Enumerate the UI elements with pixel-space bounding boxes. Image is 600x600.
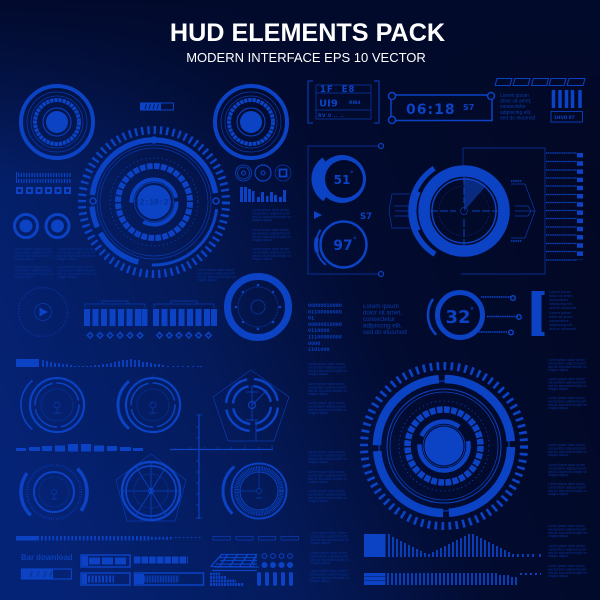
- lorem blocks: lower right left column: sed do eiusmod tempor un: [308, 457, 347, 461]
- lorem blocks: lower right right column: consectetur adipiscing elit: [548, 485, 586, 489]
- progress strip: [16, 536, 201, 540]
- lorem blocks: lower right left column: consectetur adipiscing elit: [308, 385, 346, 389]
- data list: [546, 153, 580, 260]
- radar dial: [392, 141, 532, 281]
- lorem block: panel: sed do eiusmod: [500, 115, 536, 121]
- lorem blocks: lower right right column: consectetur adipiscing elit: [548, 567, 586, 571]
- lorem blocks: lower right right column: magna aliqua: [548, 406, 568, 410]
- bar chart: small: [240, 187, 286, 202]
- vertical bars with label: 1HUD 87: [554, 115, 575, 120]
- lorem blocks: right of main dial: sed do eiusmod tempor un: [252, 235, 291, 239]
- lorem blocks: left: consectetur adipiscing elit: [57, 268, 95, 272]
- panel frame: temperature gauges: [308, 144, 384, 276]
- tick bars: left: [16, 172, 72, 183]
- binary text: 00000010000: [308, 322, 342, 328]
- lorem block: beside bracket: adipiscing elit,: [549, 302, 573, 306]
- lorem blocks: lower right right column: Lorem ipsum dolor sit am: [548, 544, 585, 548]
- lorem blocks: lower right left column: sed do eiusmod tempor un: [308, 496, 347, 500]
- block row: [134, 556, 188, 564]
- target dial: row 2 left: [7, 445, 101, 539]
- lorem blocks: lower right left column: consectetur adipiscing elit: [308, 404, 346, 408]
- lorem blocks: left: Lorem ipsum dolor sit am: [57, 247, 94, 251]
- lorem block: beside bracket: sed do eiusmod: [549, 327, 576, 331]
- target dial: row 2 right: [210, 446, 300, 536]
- digital clock panel: S7: [463, 103, 474, 112]
- lorem blocks: lower right left column: sed do eiusmod tempor un: [308, 408, 347, 412]
- lorem blocks: left: consectetur adipiscing elit: [57, 250, 95, 254]
- lorem blocks: lower right left column: [308, 362, 349, 583]
- lorem block: panel: adipiscing elit,: [500, 110, 531, 116]
- lorem blocks: lower right left column: magna aliqua: [310, 579, 330, 583]
- main clock dial: [78, 126, 230, 278]
- title: HUD ELEMENTS PACK: [170, 19, 445, 47]
- progress bar: bar download: [22, 569, 72, 579]
- lorem blocks: lower right right column: magna aliqua: [548, 473, 568, 477]
- pentagon dial: row 2 middle: [116, 454, 186, 521]
- lorem blocks: lower right left column: consectetur adipiscing elit: [310, 534, 348, 538]
- lorem blocks: right of main dial: Lorem ipsum dolor sit am: [197, 268, 234, 272]
- twin gauges: [14, 214, 69, 238]
- binary text: 01100000000: [308, 309, 342, 315]
- binary text: 1101000: [308, 347, 330, 353]
- lorem blocks: left: sed do eiusmod tempor un: [14, 254, 53, 258]
- bar group with diamonds: [85, 301, 214, 338]
- lorem blocks: lower right left column: Lorem ipsum dolor sit am: [310, 531, 347, 535]
- lorem blocks: left: magna aliqua: [14, 257, 34, 261]
- lorem blocks: lower right left column: magna aliqua: [308, 460, 328, 464]
- lorem blocks: right of main dial: magna aliqua: [197, 278, 217, 282]
- data box: 1F E8: RV 0 .. ..: [318, 113, 345, 119]
- lorem blocks: left: sed do eiusmod tempor un: [57, 254, 96, 258]
- lorem blocks: lower right right column: consectetur adipiscing elit: [548, 466, 586, 470]
- lorem blocks: left: sed do eiusmod tempor un: [57, 272, 96, 276]
- lorem blocks: lower right right column: magna aliqua: [548, 387, 568, 391]
- binary text: 0000: [308, 341, 320, 347]
- lorem block: panel: Lorem ipsum: [500, 93, 529, 99]
- gauge: 51: °: [350, 170, 354, 178]
- progress bar: striped: [81, 573, 130, 585]
- gauge: 51: 51: [334, 173, 350, 187]
- lorem blocks: lower right right column: sed do eiusmod tempor un: [548, 403, 587, 407]
- radar panel frame: [461, 148, 545, 274]
- lorem blocks: lower right left column: Lorem ipsum dolor sit am: [308, 470, 345, 474]
- lorem blocks: lower right left column: Lorem ipsum dolor sit am: [308, 489, 345, 493]
- lorem blocks: lower right left column: Lorem ipsum dolor sit am: [310, 551, 347, 555]
- lorem blocks: lower right left column: magna aliqua: [308, 411, 328, 415]
- lorem blocks: lower right left column: sed do eiusmod tempor un: [308, 389, 347, 393]
- target dial: row 1 middle: [105, 361, 193, 449]
- lorem blocks: lower right right column: Lorem ipsum dolor sit am: [548, 564, 585, 568]
- lorem block: beside bracket: sed do eiusmod: [549, 306, 576, 310]
- lorem blocks: lower right right column: consectetur adipiscing elit: [548, 527, 586, 531]
- lorem block: beside bracket: consectetur: [549, 319, 569, 323]
- lorem blocks: lower right left column: consectetur adipiscing elit: [308, 473, 346, 477]
- lorem blocks: right of main dial: magna aliqua: [252, 218, 272, 222]
- gauge: 97: [305, 208, 379, 281]
- lorem blocks: lower right right column: Lorem ipsum dolor sit am: [548, 377, 585, 381]
- lorem blocks: lower right right column: sed do eiusmod tempor un: [548, 489, 587, 493]
- lorem blocks: lower right right column: consectetur adipiscing elit: [548, 446, 586, 450]
- lorem blocks: right of main dial: consectetur adipiscing elit: [252, 231, 290, 235]
- fading strip chart: [364, 573, 541, 585]
- lorem blocks: lower right right column: Lorem ipsum dolor sit am: [548, 358, 585, 362]
- level bars: [16, 444, 143, 452]
- lorem blocks: lower right right column: magna aliqua: [548, 368, 568, 372]
- progress bar: three cells: [81, 555, 130, 567]
- hex connectors: [389, 184, 535, 238]
- big dial: lower right: [364, 366, 524, 526]
- gauge: 32 with leads: 32: [445, 307, 471, 328]
- wave bars: top left: [16, 359, 201, 367]
- small rings: [236, 165, 291, 181]
- lorem blocks: lower right left column: Lorem ipsum dolor sit am: [308, 382, 345, 386]
- lorem blocks: lower right right column: Lorem ipsum dolor sit am: [548, 443, 585, 447]
- lorem blocks: lower right right column: sed do eiusmod tempor un: [548, 551, 587, 555]
- lorem blocks: left: Lorem ipsum dolor sit am: [14, 265, 51, 269]
- gauge: 51: [307, 148, 369, 210]
- lorem blocks: right of main dial: sed do eiusmod tempor un: [252, 215, 291, 219]
- ring dial: lower right of left group: [228, 276, 288, 338]
- lorem blocks: left: consectetur adipiscing elit: [14, 250, 52, 254]
- label: bar download: Bar download: [21, 553, 73, 562]
- dial: top right of left group: [215, 86, 287, 158]
- lorem blocks: lower right right column: sed do eiusmod tempor un: [548, 384, 587, 388]
- lorem blocks: lower right left column: consectetur adipiscing elit: [308, 492, 346, 496]
- gauge: 32 with leads: [416, 275, 521, 355]
- lorem blocks: right of main dial: [197, 208, 291, 282]
- lorem blocks: lower right left column: Lorem ipsum dolor sit am: [308, 362, 345, 366]
- gauge: 97: 97: [333, 238, 353, 254]
- data box: 1F E8: 1F E8: [320, 85, 355, 95]
- lorem blocks: lower right left column: Lorem ipsum dolor sit am: [308, 401, 345, 405]
- lorem blocks: lower right left column: magna aliqua: [308, 499, 328, 503]
- lorem block: beside bracket: Lorem ipsum: [549, 290, 571, 294]
- lorem blocks: right of main dial: magna aliqua: [252, 257, 272, 261]
- lorem blocks: lower right left column: magna aliqua: [308, 480, 328, 484]
- progress bar: wide: [134, 573, 204, 585]
- lorem blocks: right of main dial: Lorem ipsum dolor sit am: [252, 228, 289, 232]
- lorem blocks: lower right right column: magna aliqua: [548, 492, 568, 496]
- lorem blocks: lower right right column: Lorem ipsum dolor sit am: [548, 482, 585, 486]
- square row: [17, 188, 70, 193]
- lorem blocks: left: consectetur adipiscing elit: [14, 268, 52, 272]
- digital clock panel: 06:18: [406, 102, 456, 118]
- lorem blocks: right of main dial: consectetur adipiscing elit: [252, 211, 290, 215]
- lorem blocks: lower right right column: consectetur adipiscing elit: [548, 380, 586, 384]
- lorem blocks: lower right left column: magna aliqua: [308, 372, 328, 376]
- lorem blocks: lower right right column: magna aliqua: [548, 534, 568, 538]
- lorem blocks: lower right left column: consectetur adipiscing elit: [308, 365, 346, 369]
- lorem blocks: lower right right column: sed do eiusmod tempor un: [548, 531, 587, 535]
- play dial: [18, 288, 68, 336]
- skewed grid: [211, 554, 259, 570]
- lorem blocks: left: magna aliqua: [14, 275, 34, 279]
- lorem blocks: left: Lorem ipsum dolor sit am: [57, 265, 94, 269]
- side bracket: [532, 291, 544, 336]
- lorem blocks: lower right left column: sed do eiusmod tempor un: [310, 558, 349, 562]
- marker: triangle and S7: [314, 211, 372, 222]
- stepped dot chart: [210, 574, 244, 584]
- lorem blocks: left: magna aliqua: [57, 275, 77, 279]
- data box: 1F E8: UI9: [319, 98, 338, 110]
- lorem block: beside bracket: dolor sit amet,: [549, 315, 573, 319]
- data box: 1F E8: RW4: [349, 100, 361, 106]
- lorem block: beside bracket: adipiscing elit,: [549, 323, 573, 327]
- lorem blocks: lower right left column: sed do eiusmod tempor un: [308, 477, 347, 481]
- lorem blocks: lower right left column: sed do eiusmod tempor un: [310, 538, 349, 542]
- lorem blocks: lower right right column: magna aliqua: [548, 554, 568, 558]
- lorem blocks: lower right right column: consectetur adipiscing elit: [548, 399, 586, 403]
- outlined strip: [213, 536, 298, 540]
- pill bars: [259, 574, 291, 584]
- lorem block: beside binary: consectetur: [363, 316, 395, 323]
- lorem blocks: lower right right column: consectetur adipiscing elit: [548, 547, 586, 551]
- ring and dot grid: [262, 554, 296, 568]
- lorem block: beside bracket: Lorem ipsum: [549, 311, 571, 315]
- data box: 1F E8: [308, 81, 379, 123]
- clock time: 12:10:23: [135, 198, 173, 208]
- lorem block: panel: dolor sit amet,: [500, 99, 531, 105]
- lorem blocks: left: magna aliqua: [57, 257, 77, 261]
- lorem block: beside binary: sed do eiusmod: [363, 329, 407, 336]
- lorem block: beside binary: adipiscing elit,: [363, 322, 402, 330]
- lorem blocks: lower right right column: [548, 358, 587, 578]
- lorem block: beside bracket: dolor sit amet,: [549, 294, 573, 298]
- dash markers: [511, 181, 522, 241]
- binary text: 11100000000: [308, 334, 342, 340]
- lorem blocks: lower right right column: sed do eiusmod tempor un: [548, 450, 587, 454]
- binary text: 0110000: [308, 328, 330, 334]
- lorem blocks: left: [14, 247, 96, 279]
- lorem blocks: right of main dial: sed do eiusmod tempor un: [197, 275, 236, 279]
- lorem blocks: lower right right column: sed do eiusmod tempor un: [548, 470, 587, 474]
- lorem blocks: right of main dial: consectetur adipiscing elit: [197, 271, 235, 275]
- lorem blocks: lower right left column: consectetur adipiscing elit: [308, 453, 346, 457]
- lorem blocks: lower right left column: consectetur adipiscing elit: [310, 572, 348, 576]
- lorem blocks: lower right left column: magna aliqua: [310, 561, 330, 565]
- lorem blocks: right of main dial: Lorem ipsum dolor sit am: [252, 208, 289, 212]
- lorem block: panel: consectetur: [500, 104, 526, 110]
- lorem blocks: lower right left column: Lorem ipsum dolor sit am: [308, 450, 345, 454]
- vertical bars with label: [551, 90, 582, 122]
- dial: top left: [21, 86, 93, 158]
- lorem blocks: lower right left column: sed do eiusmod tempor un: [308, 369, 347, 373]
- lorem blocks: lower right right column: sed do eiusmod tempor un: [548, 365, 587, 369]
- binary text: 01: [308, 316, 314, 322]
- lorem blocks: lower right right column: Lorem ipsum dolor sit am: [548, 396, 585, 400]
- lorem blocks: right of main dial: sed do eiusmod tempor un: [252, 254, 291, 258]
- lorem blocks: left: sed do eiusmod tempor un: [14, 272, 53, 276]
- lorem blocks: right of main dial: Lorem ipsum dolor sit am: [252, 247, 289, 251]
- digital clock panel: [388, 92, 494, 124]
- lorem blocks: lower right left column: consectetur adipiscing elit: [310, 554, 348, 558]
- lorem blocks: lower right right column: consectetur adipiscing elit: [548, 361, 586, 365]
- lorem blocks: lower right right column: sed do eiusmod tempor un: [548, 571, 587, 575]
- waveform chart: [364, 534, 540, 557]
- lorem block: beside binary: dolor sit amet,: [363, 310, 402, 316]
- gauge: 97: °: [353, 236, 356, 244]
- lorem blocks: lower right right column: Lorem ipsum dolor sit am: [548, 524, 585, 528]
- lorem block: beside bracket: consectetur: [549, 298, 569, 302]
- lorem blocks: lower right left column: magna aliqua: [310, 541, 330, 545]
- lorem blocks: lower right left column: Lorem ipsum dolor sit am: [310, 569, 347, 573]
- lorem block: beside binary: Lorem ipsum: [363, 303, 399, 310]
- marker: triangle and S7: S7: [360, 212, 372, 222]
- lorem blocks: lower right left column: sed do eiusmod tempor un: [310, 576, 349, 580]
- lorem blocks: left: Lorem ipsum dolor sit am: [14, 247, 51, 251]
- progress bar: top: [140, 103, 174, 110]
- subtitle: MODERN INTERFACE EPS 10 VECTOR: [186, 50, 426, 65]
- crosshair ruler: [170, 415, 273, 519]
- gauge: 32 with leads: °: [470, 306, 474, 315]
- target dial: row 1 left: [8, 360, 98, 450]
- lorem blocks: lower right left column: magna aliqua: [308, 392, 328, 396]
- lorem blocks: lower right right column: Lorem ipsum dolor sit am: [548, 463, 585, 467]
- lorem blocks: right of main dial: magna aliqua: [252, 238, 272, 242]
- lorem blocks: right of main dial: consectetur adipiscing elit: [252, 250, 290, 254]
- lorem blocks: lower right right column: magna aliqua: [548, 574, 568, 578]
- pentagon target: [213, 370, 289, 441]
- parallelogram row: [495, 78, 585, 86]
- lorem blocks: lower right right column: magna aliqua: [548, 453, 568, 457]
- binary text: 00000010000: [308, 303, 342, 309]
